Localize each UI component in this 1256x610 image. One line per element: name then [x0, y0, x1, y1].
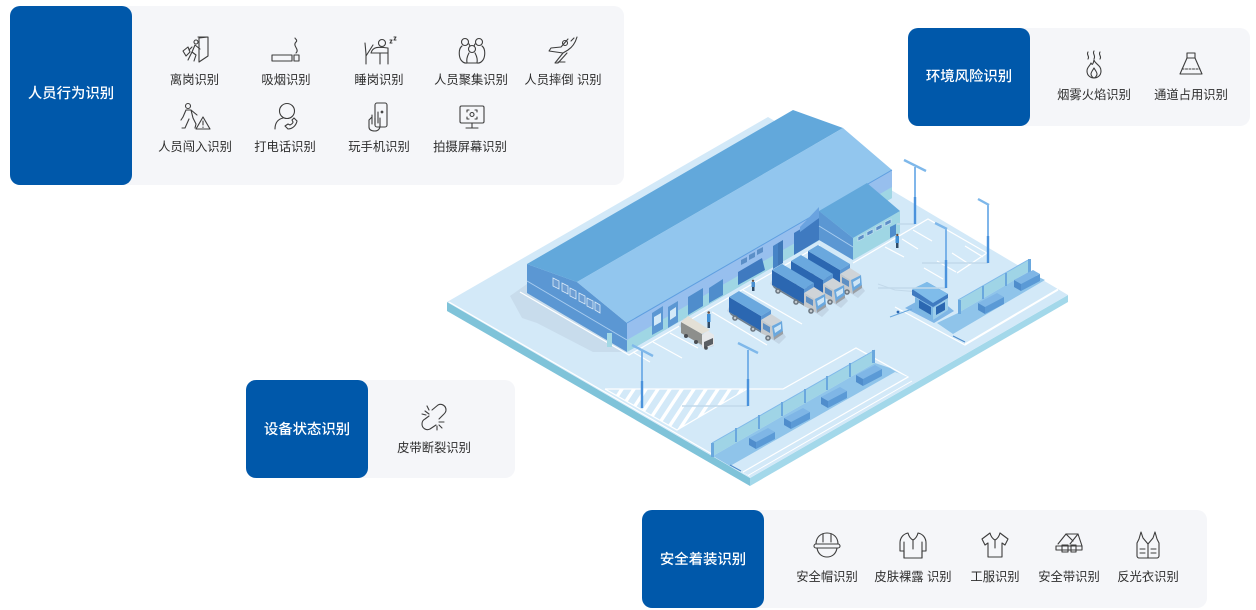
heading: safety wear — [642, 510, 764, 608]
item: intrusion — [158, 104, 232, 154]
item: phone call: 打电话识别 — [254, 140, 316, 154]
item: passage occupied: 通道占用识别 — [1154, 87, 1228, 102]
item: reflective vest: 反光衣识别 — [1117, 569, 1179, 584]
item: smoke and flame — [1057, 51, 1131, 102]
loading doors — [652, 207, 819, 335]
item: leaving post: 离岗识别 — [170, 72, 219, 87]
item: work clothes: 工服识别 — [970, 570, 1020, 584]
heading: environmental risk — [908, 28, 1030, 126]
item: passage occupied — [1154, 53, 1228, 102]
item: crowd gathering: 人员聚集识别 — [434, 72, 508, 87]
item: smoking: 吸烟识别 — [261, 73, 311, 87]
street lamps — [632, 160, 989, 408]
item: crowd gathering — [434, 38, 508, 87]
item: belt break: 皮带断裂识别 — [397, 440, 471, 455]
heading: personnel behaviour: 人员行为识别 — [28, 85, 114, 102]
item: screen capture — [433, 106, 507, 154]
lower green strip and fence — [711, 350, 912, 476]
item: phone call — [254, 104, 316, 154]
panel: personnel behaviour recognition — [10, 6, 624, 185]
item: safety belt: 安全带识别 — [1038, 569, 1100, 584]
gable windows — [553, 278, 600, 313]
building shadow — [510, 284, 627, 352]
warehouse — [527, 110, 892, 352]
item: reflective vest — [1117, 532, 1179, 584]
item: playing phone: 玩手机识别 — [348, 140, 410, 154]
item: helmet: 安全帽识别 — [796, 569, 858, 584]
item: safety belt — [1038, 534, 1100, 584]
crosswalk — [616, 390, 744, 429]
heading: environmental risk: 环境风险识别 — [926, 67, 1012, 85]
item: falling: 人员摔倒 识别 — [524, 72, 602, 87]
isometric logistics park scene — [447, 110, 1068, 486]
item: belt break — [397, 404, 471, 455]
item: smoke and flame: 烟雾火焰识别 — [1057, 87, 1131, 102]
panel: equipment status recognition — [246, 380, 515, 478]
item: playing phone — [348, 103, 410, 154]
ground platform — [447, 117, 1068, 486]
trucks — [727, 245, 865, 344]
item: sleeping: 睡岗识别 — [354, 73, 404, 87]
workers — [707, 234, 899, 328]
item: skin exposure — [874, 533, 952, 584]
heading: personnel behaviour — [10, 6, 132, 185]
item: intrusion: 人员闯入识别 — [158, 139, 232, 154]
item: helmet — [796, 533, 858, 584]
heading: equipment status: 设备状态识别 — [264, 420, 350, 438]
item: falling — [524, 37, 602, 87]
item: sleeping — [354, 37, 404, 87]
ground markings — [520, 219, 1058, 473]
item: work clothes — [970, 533, 1020, 584]
annex building — [819, 183, 900, 260]
guard booth — [890, 282, 954, 323]
item: skin exposure: 皮肤裸露 识别 — [874, 569, 952, 584]
heading: equipment status — [246, 380, 368, 478]
item: leaving post — [170, 37, 219, 87]
panel: environmental risk recognition — [908, 28, 1250, 126]
panel: safety wear recognition — [642, 510, 1207, 608]
heading: safety wear: 安全着装识别 — [660, 550, 746, 568]
gate-side green strip and fence — [937, 259, 1058, 344]
white delivery truck — [679, 316, 714, 350]
item: screen capture: 拍摄屏幕识别 — [433, 139, 507, 154]
item: smoking — [261, 38, 311, 87]
